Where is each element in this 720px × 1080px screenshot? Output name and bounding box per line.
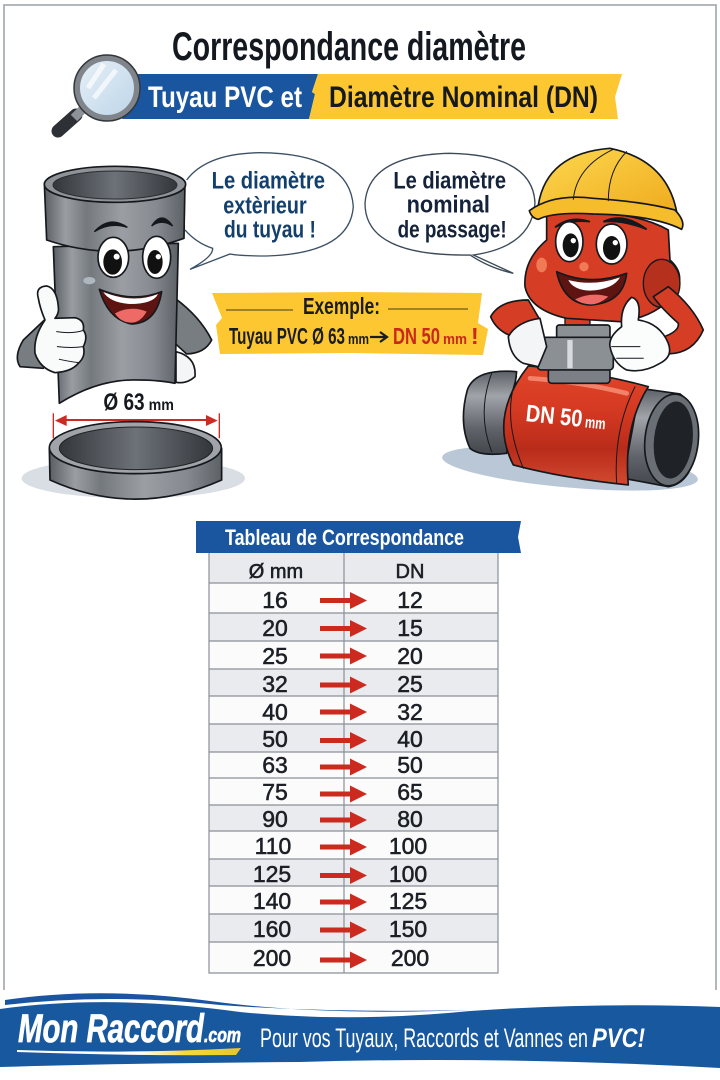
column values: 65 <box>397 779 423 805</box>
column headers: Ø mm <box>249 561 303 583</box>
bubble text: Le diamètre <box>393 167 506 194</box>
subtitle banner <box>122 74 622 119</box>
column values: 110 <box>255 833 291 859</box>
left pipe end <box>463 371 517 454</box>
bubble text <box>212 167 325 243</box>
column values: 20 <box>397 643 423 669</box>
column values: 40 <box>397 726 423 752</box>
dimension: Ø 63 mm <box>53 389 219 438</box>
bubble text: du tuyau ! <box>224 216 316 243</box>
logo swoosh <box>17 1048 241 1055</box>
left arm and thumbs-up hand <box>17 286 86 373</box>
column values: 150 <box>389 916 427 942</box>
fitting label: DN 50 <box>525 400 584 433</box>
dimension label: Ø 63 <box>103 389 145 416</box>
example heading: Exemple: <box>303 293 380 319</box>
right mascot: DN fitting <box>440 148 703 499</box>
title: Correspondance diamètre <box>172 25 526 69</box>
column values: 20 <box>262 615 288 641</box>
example text: DN 50 <box>393 323 440 349</box>
bubble text: Le diamètre <box>212 167 325 194</box>
column values: 50 <box>262 726 288 752</box>
bubble text: nominal <box>407 192 490 219</box>
speech bubble: diamètre extérieur <box>185 153 353 269</box>
column headers <box>249 561 424 583</box>
column values: 100 <box>389 861 427 887</box>
pipe opening <box>44 166 186 202</box>
column values: 25 <box>262 643 288 669</box>
footer logo: .com <box>204 1025 241 1047</box>
example text: mm <box>443 331 467 348</box>
column values: 32 <box>397 699 423 725</box>
helmet <box>529 148 683 229</box>
banner text: Tuyau PVC et: Tuyau PVC et <box>148 81 302 114</box>
union nut <box>537 315 613 383</box>
example banner <box>212 292 488 355</box>
column values <box>253 587 429 971</box>
face <box>83 218 173 324</box>
fitting label: mm <box>584 414 606 433</box>
column values: 160 <box>253 916 291 942</box>
dimension arrow <box>53 413 219 438</box>
footer background <box>0 1002 720 1068</box>
head <box>525 213 680 322</box>
bubble text <box>393 167 507 243</box>
column values: 16 <box>262 587 288 613</box>
bubble text: extèrieur <box>223 192 307 219</box>
face <box>555 218 647 305</box>
right arm and hand <box>175 298 212 383</box>
column values: 12 <box>397 587 423 613</box>
column values: 25 <box>397 671 423 697</box>
speech bubble: diamètre nominal <box>365 153 535 273</box>
footer logo: Mon Raccord <box>18 1007 205 1051</box>
column values: 125 <box>253 861 291 887</box>
left red arm <box>491 300 540 337</box>
footer band <box>0 993 720 1068</box>
left mascot: PVC pipe <box>17 166 212 403</box>
column values: 200 <box>253 945 291 971</box>
pipe body <box>53 243 178 403</box>
ground shadow <box>440 438 699 499</box>
column values: 50 <box>397 752 423 778</box>
bubble text: de passage! <box>398 216 507 243</box>
column values: 63 <box>262 752 288 778</box>
red fitting body <box>504 366 648 485</box>
pipe collar <box>44 183 185 251</box>
column values: 90 <box>262 806 288 832</box>
red arrows <box>320 592 367 968</box>
table heading banner: Tableau de Correspondance <box>225 525 464 550</box>
column values: 140 <box>253 888 291 914</box>
footer wave <box>5 993 470 1012</box>
table background rows <box>209 553 498 973</box>
column values: 200 <box>391 945 429 971</box>
footer tagline: PVC! <box>592 1023 645 1053</box>
pipe ring cross-section <box>22 422 245 499</box>
example text: mm <box>348 331 369 348</box>
column values: 80 <box>397 806 423 832</box>
column values: 125 <box>389 888 427 914</box>
example text: Tuyau PVC Ø 63 <box>229 323 345 349</box>
column values: 100 <box>389 833 427 859</box>
column headers: DN <box>396 561 424 583</box>
white gloves <box>508 297 670 371</box>
banner: yellow segment <box>309 74 622 119</box>
right pipe opening <box>640 391 703 489</box>
right pipe end <box>623 388 697 487</box>
dimension label: mm <box>149 397 174 414</box>
right red arm <box>653 287 703 354</box>
column values: 75 <box>262 779 288 805</box>
column values: 40 <box>262 699 288 725</box>
correspondence table <box>209 553 498 973</box>
column values: 15 <box>397 615 423 641</box>
banner text: Diamètre Nominal (DN): Diamètre Nominal (DN) <box>329 81 598 114</box>
banner: blue segment <box>122 74 318 119</box>
example text: ! <box>471 323 479 349</box>
column values: 32 <box>262 671 288 697</box>
icon: magnifying glass <box>58 55 140 131</box>
